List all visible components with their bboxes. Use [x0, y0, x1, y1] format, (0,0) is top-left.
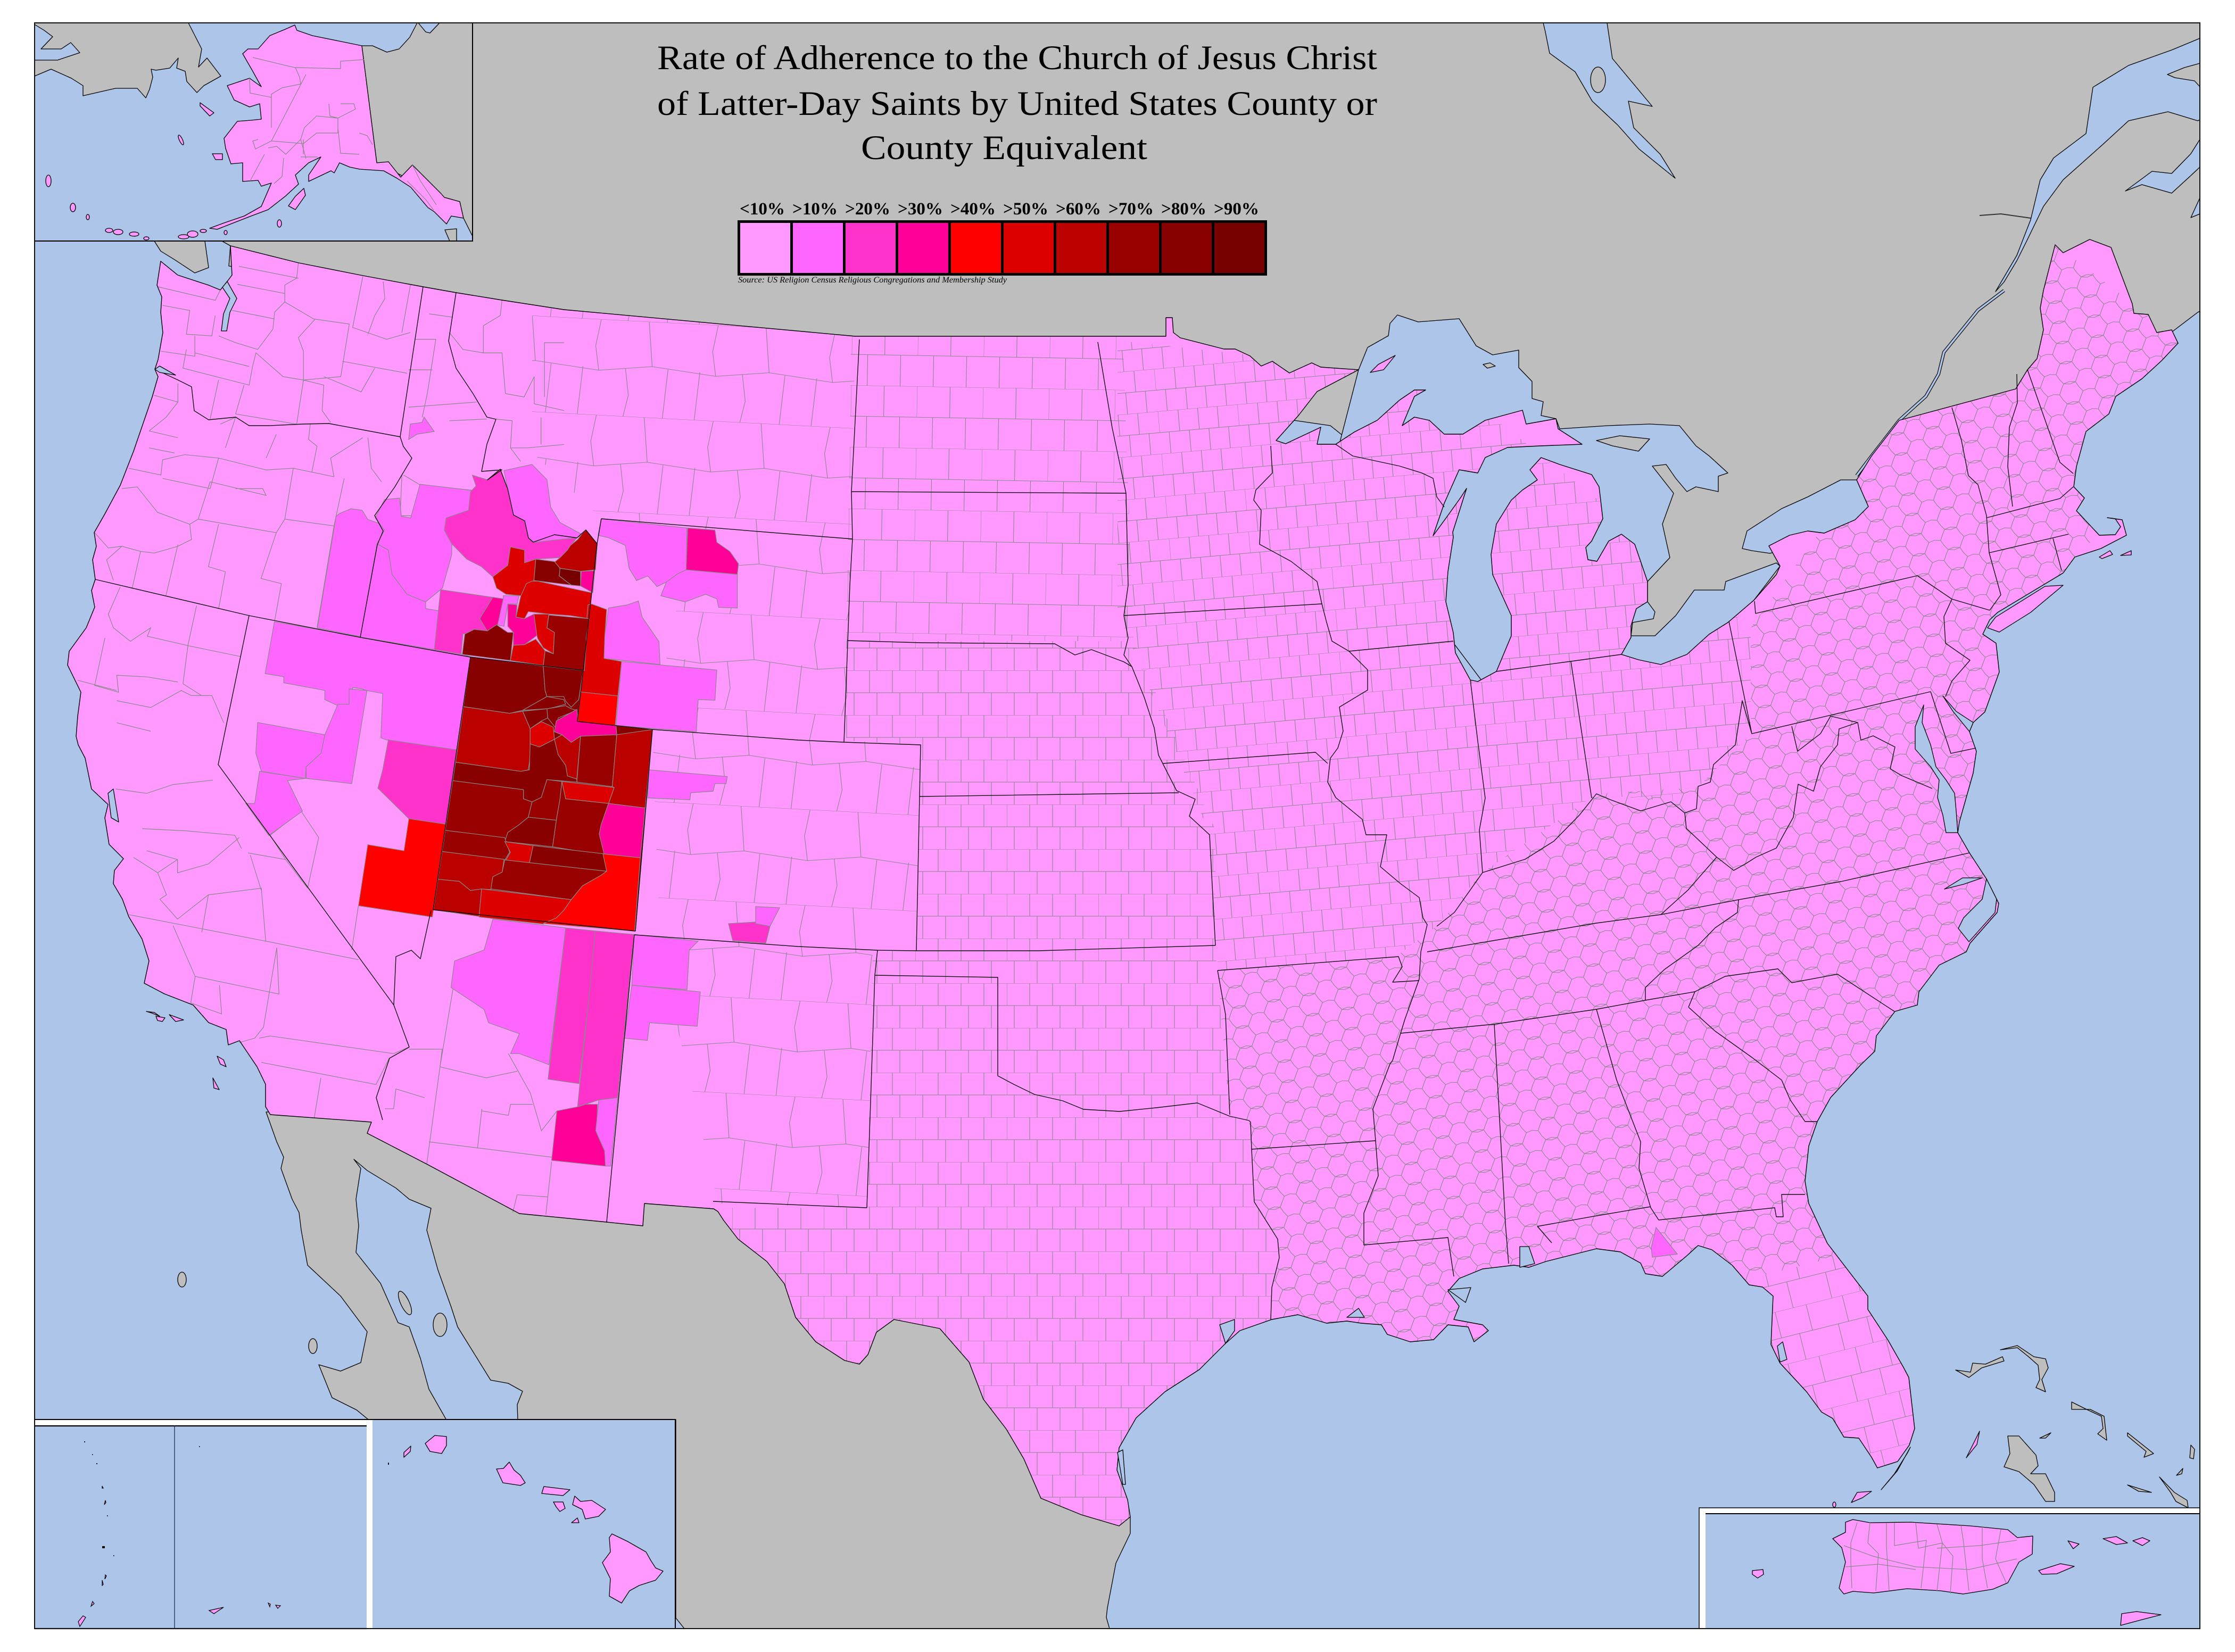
source note: Source: US Religion Census Religious Congregations and Membership Study	[738, 276, 1007, 285]
water: bays and sounds	[108, 281, 1997, 1484]
legend labels: >40%	[950, 200, 996, 219]
title: Rate of Adherence to the Church of Jesus Christ	[657, 39, 1377, 77]
county lines: California, Nevada and Arizona	[116, 780, 557, 1215]
map: contiguous United States base	[68, 239, 2178, 1526]
islands: Bahamas	[1956, 1346, 2195, 1508]
land: Canada	[154, 23, 2200, 638]
legend swatches	[738, 220, 1267, 276]
state borders	[95, 287, 2073, 1319]
title: County Equivalent	[861, 129, 1147, 167]
lakes: Great Lakes	[1330, 315, 1868, 692]
choropleth: counties in Arizona and New Mexico	[451, 919, 700, 1166]
legend labels	[740, 200, 1259, 219]
choropleth: counties in the Utah and Idaho core, upper Rockies	[246, 464, 739, 931]
inset: Aleutian and Pacific island chains	[35, 1425, 367, 1629]
inset: Alaska	[35, 23, 473, 241]
title: of Latter-Day Saints by United States County or	[657, 85, 1377, 123]
legend labels: >20%	[845, 200, 890, 219]
legend labels: >70%	[1108, 200, 1154, 219]
inset frame: Alaska border	[35, 23, 473, 241]
coastline outline: contiguous United States	[68, 239, 2178, 1526]
water: Gulf of California	[354, 1159, 523, 1420]
legend	[738, 200, 1267, 285]
land: Mexico	[266, 1112, 1130, 1629]
white separators: lower left insets	[35, 1419, 373, 1629]
legend labels: >80%	[1161, 200, 1206, 219]
county lines: generalised county mesh	[532, 234, 2187, 1543]
county lines: Pacific Northwest and northern California	[78, 263, 564, 731]
islands: Long Island, Cape islands and California Channel Islands	[146, 551, 2131, 1507]
inset: Puerto Rico and US Virgin Islands	[1699, 1508, 2200, 1629]
inset: Hawaii	[35, 1419, 675, 1629]
legend labels: >10%	[792, 200, 838, 219]
legend labels: >30%	[898, 200, 943, 219]
legend labels: >90%	[1214, 200, 1259, 219]
legend labels: >50%	[1003, 200, 1048, 219]
legend labels: <10%	[740, 200, 785, 219]
title	[657, 39, 1377, 167]
legend labels: >60%	[1056, 200, 1101, 219]
islands: Baja California	[178, 1272, 447, 1354]
choropleth: isolated counties in Montana, Colorado and Florida	[409, 417, 1677, 1257]
